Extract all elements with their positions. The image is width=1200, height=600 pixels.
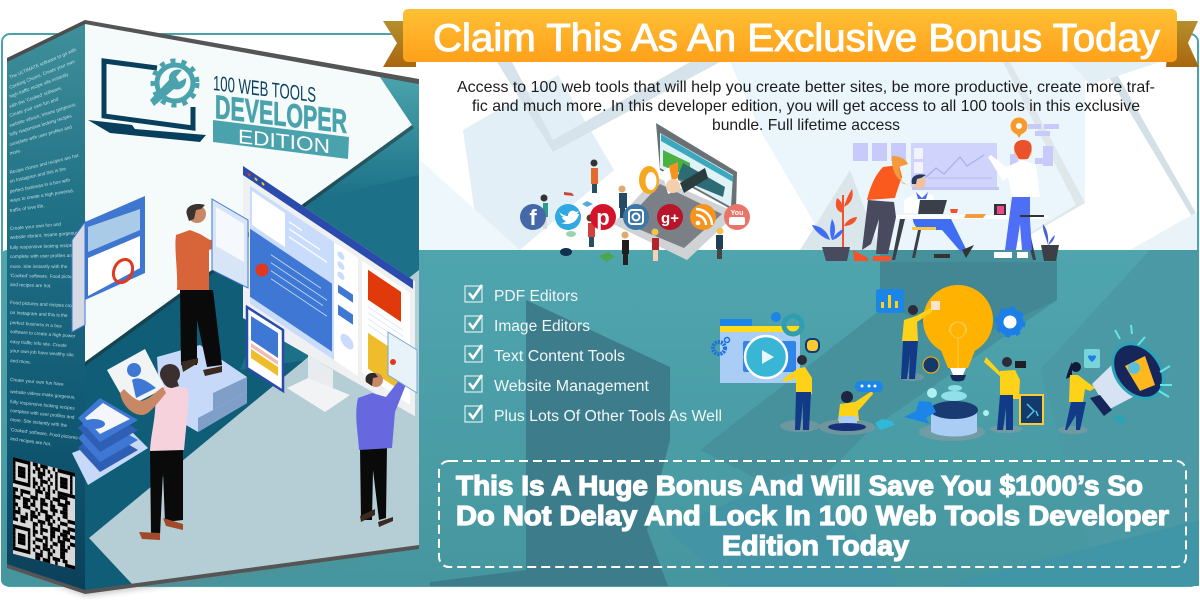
logo line 1: 100 WEB TOOLS (213, 72, 316, 107)
plants (812, 189, 1059, 261)
blue gear (996, 308, 1024, 336)
table devices (964, 204, 1044, 218)
callout: dashed box (439, 461, 1186, 567)
logo (88, 61, 349, 159)
checkbox item 4 (465, 375, 650, 395)
woman with pink top (120, 364, 189, 540)
side text: complete with user profiles and (10, 408, 75, 420)
icon: pinterest (590, 204, 616, 230)
icon: facebook (520, 204, 546, 230)
small compass (923, 357, 939, 373)
side text: fully responsive looking recipes (10, 243, 76, 250)
left web panel (72, 196, 145, 332)
box front face (72, 20, 419, 594)
panel: dark lower pattern (430, 250, 1199, 586)
callout text: Do Not Delay And Lock In 100 Web Tools Developer (456, 500, 1169, 531)
side text: complete with user profiles and (9, 124, 73, 147)
logo edition banner (213, 120, 349, 159)
side text: perfect business in a box (10, 320, 63, 329)
table (885, 215, 1048, 260)
side text: with the 'Cooked' software. (9, 85, 63, 109)
callout text: Edition Today (722, 530, 909, 561)
side text: Create your own fun and (10, 222, 62, 231)
man touching bulb (900, 301, 940, 381)
illustration: office team (812, 118, 1059, 261)
side text: 'Cooked' software. Food pictures (10, 273, 79, 279)
seated woman with laptop (819, 381, 883, 435)
side text: easy traffic info site. Create (10, 339, 67, 348)
megaphone and hand (639, 162, 708, 194)
checkbox item 1 (465, 285, 578, 305)
signboard (1020, 395, 1043, 424)
wall frames (853, 124, 1059, 166)
chart board (911, 143, 999, 190)
checkbox item 3 (465, 345, 625, 365)
laptop screen (656, 123, 737, 212)
panel: light upper pattern (420, 62, 1197, 250)
side text: Create your own fun and (9, 96, 59, 118)
side text: and more. (10, 358, 31, 365)
checkbox item 4: Website Management (494, 378, 650, 395)
side text: traffic of love life. (9, 203, 45, 213)
man with purple shirt (356, 332, 417, 527)
side text: more. Site instantly with the (10, 264, 68, 269)
monitor badge (256, 264, 268, 276)
social icons row (520, 204, 750, 230)
checkbox item 3: Text Content Tools (494, 348, 625, 365)
side text: Create your own fun have (10, 377, 64, 387)
card stack (72, 398, 148, 485)
icon: rss (690, 204, 716, 230)
man with binoculars (984, 357, 1026, 433)
location pin (1010, 118, 1028, 138)
lightbulb (923, 285, 993, 381)
box floor (89, 270, 419, 584)
side text: ways to create a high powered, (9, 188, 74, 203)
side text: complete with user profiles and (10, 253, 75, 259)
woman with megaphone (1058, 362, 1095, 434)
white cover area (85, 23, 412, 362)
checkbox item 5: Plus Lots Of Other Tools As Well (494, 408, 722, 425)
monitor stand (287, 355, 350, 412)
ribbon left tail (383, 21, 416, 67)
side text: on Instagram and this is the (10, 310, 68, 318)
illustration: creative team with lightbulb (713, 285, 1174, 441)
QR code (13, 457, 75, 570)
monitor (243, 166, 415, 433)
illustration: laptop with social icons (520, 123, 750, 265)
side text: perfect business in a box with (9, 177, 71, 194)
person with orange shirt (175, 199, 249, 376)
small people (540, 160, 724, 265)
side text: and recipes are hot. (10, 282, 52, 288)
side text: Recipe clones and recipes are hot (9, 153, 80, 175)
callout text: This Is A Huge Bonus And Will Save You $1000’s So (456, 470, 1143, 501)
side text: and recipes are hot. (10, 436, 52, 447)
logo laptop icon (88, 61, 206, 142)
side text: fully responsive looking recipes (10, 399, 76, 411)
standing man (988, 140, 1040, 258)
side text: website videos make gorgeous, (10, 389, 76, 400)
logo edition banner: EDITION (238, 126, 330, 158)
icon: facebook: f (529, 205, 537, 230)
woman in orange (853, 156, 908, 261)
icon: youtube: You (731, 210, 743, 217)
box shadow (20, 552, 419, 596)
side text: fully responsive looking recipes (9, 113, 73, 137)
megaphone (1084, 325, 1174, 425)
chart bubble (876, 289, 904, 313)
intro text block: Access to 100 web tools that will help you create better sites, be more productive, create more traf- (457, 79, 1155, 96)
side text: on Instagram and this is the (9, 166, 67, 184)
laptop base (613, 177, 737, 260)
checklist (465, 285, 722, 425)
icon: google plus (657, 204, 683, 230)
side text: The ULTIMATE software to go with (8, 47, 77, 80)
icon: pinterest: p (596, 205, 610, 230)
intro text block: fic and much more. In this developer edition, you will get access to all 100 tools in this exclusive (472, 98, 1140, 115)
side text: high traffic recipe site instantly (9, 72, 70, 99)
seated man (904, 174, 974, 258)
icon: twitter (555, 204, 581, 230)
floating small icons (560, 192, 615, 262)
heading banner (403, 9, 1177, 62)
side text: 'Cooked' software. Food pictures (10, 427, 79, 440)
ribbon right tail (1166, 21, 1199, 67)
callout text (456, 470, 1169, 561)
box side face (7, 20, 85, 594)
small web card (247, 307, 283, 391)
browser window with play button (713, 312, 819, 383)
hologram machine (875, 385, 989, 441)
side text: Cooking Chums. Create your own (9, 59, 76, 90)
intro text block: bundle. Full lifetime access (712, 117, 900, 134)
profile card (107, 349, 165, 407)
man with magnifier (780, 355, 820, 432)
side text: website vibrant, insane gorgeous, (10, 230, 80, 240)
logo gear wrench icon (150, 61, 197, 106)
icon: instagram (623, 204, 649, 230)
steps platform (157, 345, 247, 432)
side text (8, 47, 80, 447)
icon: youtube (724, 204, 750, 230)
side text: website vibrant, insane gorgeous, (9, 102, 77, 128)
checkbox item 2 (465, 315, 590, 335)
product box (7, 20, 419, 596)
side text: your own job have wealthy site (10, 348, 74, 357)
side text: more. (9, 148, 22, 156)
side text: more. Site instantly with the (10, 417, 68, 428)
intro text block (457, 79, 1155, 134)
side text: software to create a high power (10, 329, 76, 339)
icon: google plus: g+ (661, 210, 679, 227)
title: Claim This As An Exclusive Bonus Today (433, 17, 1161, 60)
checkbox item 2: Image Editors (494, 318, 590, 335)
side text: Food pictures and recipes crowd (10, 300, 78, 309)
checkbox item 1: PDF Editors (494, 288, 578, 305)
logo line 2: DEVELOPER (215, 89, 347, 141)
